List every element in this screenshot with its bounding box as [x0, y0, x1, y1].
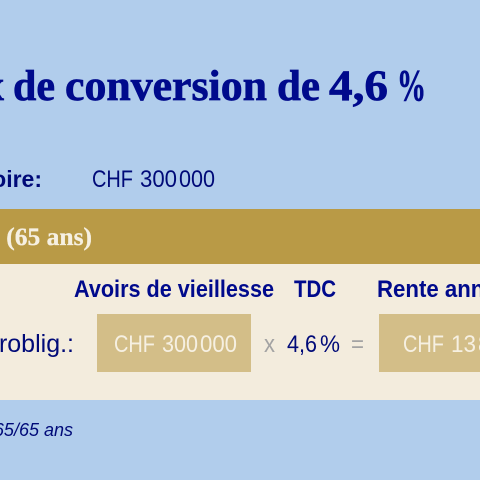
title: % [397, 61, 426, 110]
conversion rate value: 4,6 [287, 331, 317, 358]
mandatory savings line [0, 166, 215, 193]
title: 4,6 [329, 63, 388, 110]
panel: gold header band [0, 209, 480, 264]
conversion rate value [287, 331, 340, 358]
equals sign: = [351, 331, 364, 358]
title: de [13, 63, 55, 110]
value box: annual pension [379, 314, 480, 372]
multiply sign: x [264, 331, 275, 358]
value box: annual pension: CHF [403, 331, 444, 358]
value box: annual pension: 13 [451, 331, 476, 358]
mandatory savings line: 000 [179, 166, 215, 193]
value box: savings: CHF [114, 331, 155, 358]
conversion rate value: % [320, 331, 340, 358]
title: de [277, 63, 320, 110]
mandatory savings line: 300 [140, 166, 177, 193]
panel: calculation table [0, 264, 480, 400]
mandatory savings line: CHF [92, 166, 133, 193]
title [0, 61, 426, 110]
value box: savings: 000 [200, 331, 237, 358]
column heading: TDC: TDC [294, 276, 336, 303]
value box: savings [97, 314, 251, 372]
column heading: savings: Avoirs de vieillesse [74, 276, 274, 303]
value box: savings: 300 [162, 331, 198, 358]
title: conversion [65, 63, 267, 110]
